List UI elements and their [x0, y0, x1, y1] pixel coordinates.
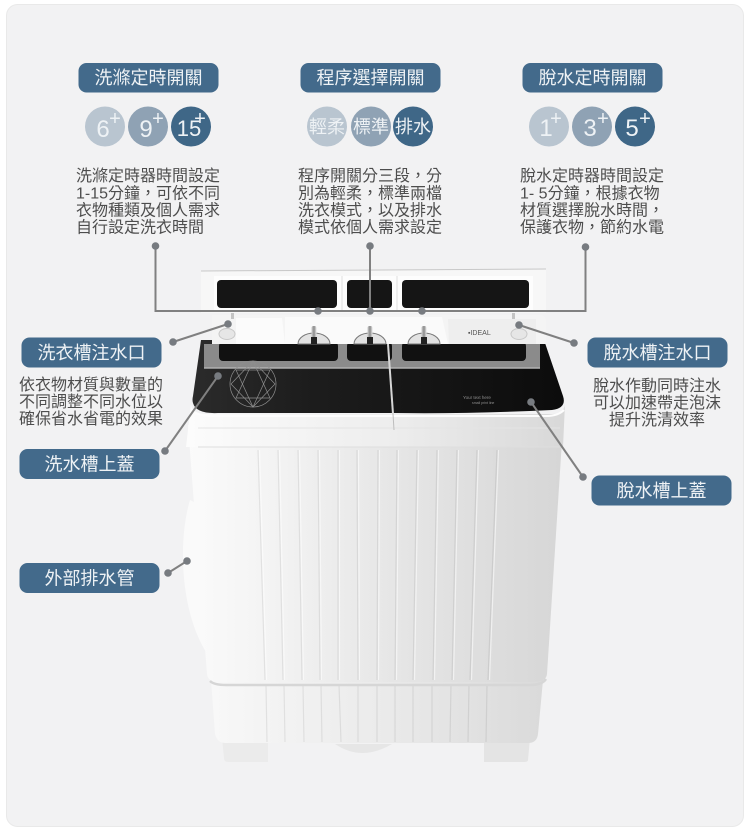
heading: spin timer: 脫水定時開關	[538, 68, 646, 88]
left foot	[222, 738, 268, 762]
callout: wash tub lid	[20, 449, 160, 479]
wash timer description: 洗滌定時器時間設定	[76, 167, 220, 185]
spin timer circles: +	[550, 108, 562, 130]
right foot	[484, 738, 530, 762]
left water inlet	[219, 313, 235, 340]
wash tub inlet description: 不同調整不同水位以	[19, 393, 163, 411]
washing machine	[183, 269, 565, 762]
leader lines	[152, 242, 589, 577]
wash timer circles	[85, 106, 211, 146]
spin timer circles: 5	[625, 115, 639, 142]
program circles	[307, 106, 433, 146]
center base bump	[335, 744, 392, 753]
wash timer circles: +	[194, 108, 206, 130]
spin timer circles: 1	[539, 115, 553, 142]
wash timer circles: +	[152, 108, 164, 130]
body ribs	[210, 450, 546, 742]
spin timer description: 保護衣物，節約水電	[520, 218, 664, 236]
heading: spin timer	[522, 63, 662, 92]
panel: spin timer	[520, 63, 664, 236]
panel: wash timer	[76, 63, 220, 236]
wash timer description: 衣物種類及個人需求	[76, 202, 220, 220]
heading: program selector	[300, 63, 440, 92]
wash timer circles: 15	[177, 116, 201, 141]
raised rear lid	[201, 269, 546, 313]
lid small print: small print line	[472, 401, 494, 405]
lid reflection frame	[204, 344, 540, 369]
knob left	[298, 326, 330, 344]
glass lid top	[192, 340, 564, 413]
callout: external drain hose	[20, 563, 160, 593]
callout: wash tub inlet	[22, 338, 162, 368]
right water inlet	[511, 313, 527, 340]
lower base band	[211, 680, 543, 743]
spin timer circles: +	[597, 108, 609, 130]
program circles: 排水	[395, 117, 431, 137]
drain hose	[183, 500, 208, 652]
control panel	[212, 313, 546, 344]
callout: spin tub lid	[592, 476, 732, 506]
spin timer description: 脫水定時器時間設定	[520, 167, 664, 185]
heading: wash timer	[78, 63, 218, 92]
callout: spin tub inlet	[588, 338, 728, 368]
wash timer description: 自行設定洗衣時間	[76, 218, 204, 236]
wash timer circles: 9	[139, 116, 153, 143]
program description: 洗衣模式，以及排水	[298, 202, 442, 220]
top rim	[186, 404, 565, 447]
knob right	[408, 326, 440, 344]
wash timer circles: +	[109, 108, 121, 130]
main body	[188, 425, 563, 682]
program description: 模式依個人需求設定	[298, 218, 442, 236]
wash timer circles: 6	[96, 116, 110, 143]
program description: 程序開關分三段，分	[298, 167, 442, 185]
wash timer description: 1-15分鐘，可依不同	[76, 184, 220, 202]
program circles: 輕柔	[309, 117, 345, 137]
callout: wash tub inlet: 洗衣槽注水口	[38, 343, 146, 363]
callout: external drain hose: 外部排水管	[44, 568, 134, 588]
spin tub inlet description: 可以加速帶走泡沫	[593, 394, 721, 412]
spin timer description: 材質選擇脫水時間，	[520, 202, 664, 220]
lid small print: Your text here	[463, 395, 491, 400]
reflected windows	[219, 342, 526, 361]
heading: program selector: 程序選擇開關	[316, 68, 424, 88]
diamond pattern	[230, 361, 276, 407]
spin timer circles: +	[639, 108, 651, 130]
program description: 別為輕柔，標準兩檔	[298, 184, 442, 202]
program circles: 標準	[353, 117, 389, 137]
callout: wash tub lid: 洗水槽上蓋	[44, 454, 134, 474]
panel: program selector	[298, 63, 442, 236]
spin timer circles	[529, 106, 655, 146]
brand logo: ▪IDEAL	[468, 330, 491, 337]
callout: spin tub inlet: 脫水槽注水口	[604, 343, 712, 363]
lid small print	[463, 395, 494, 405]
wash tub inlet description: 依衣物材質與數量的	[19, 376, 163, 394]
spin tub inlet description: 脫水作動同時注水	[593, 377, 721, 395]
wash tub inlet description: 確保省水省電的效果	[19, 410, 163, 428]
heading: wash timer: 洗滌定時開關	[94, 68, 202, 88]
spin tub inlet description: 提升洗清效率	[609, 411, 705, 429]
center lid divider	[388, 344, 393, 414]
knob center	[354, 326, 386, 344]
spin timer circles: 3	[583, 115, 597, 142]
spin timer description: 1- 5分鐘，根據衣物	[520, 184, 660, 202]
lid windows	[217, 280, 529, 308]
callout: spin tub lid: 脫水槽上蓋	[616, 481, 706, 501]
